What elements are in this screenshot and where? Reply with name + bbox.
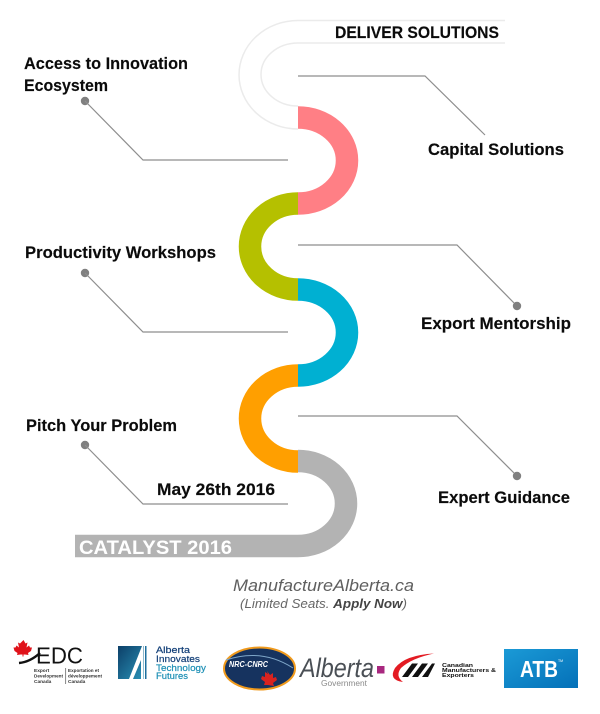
label: export mentorship: Export Mentorship <box>421 315 571 333</box>
label: pitch your problem: Pitch Your Problem <box>26 417 177 435</box>
winding road <box>75 20 505 546</box>
logo: Alberta Innovates Technology Futures <box>118 645 206 682</box>
logo: Alberta Government: Government <box>321 679 368 688</box>
road segment: pitch your problem (orange) <box>250 376 298 462</box>
callout line: export mentorship <box>298 245 521 310</box>
callout line: expert guidance <box>298 416 521 480</box>
label: access to innovation ecosystem: Access to Innovation <box>24 55 188 73</box>
road segment: deliver solutions (white) <box>239 20 505 129</box>
label: catalyst 2016: CATALYST 2016 <box>79 537 232 559</box>
logo: EDC: développement <box>68 674 102 680</box>
logo: EDC: Development <box>34 674 63 680</box>
road segment: export mentorship (blue) <box>298 290 347 376</box>
logo: EDC: Canada <box>68 679 86 685</box>
label: may 26th 2016: May 26th 2016 <box>157 481 275 499</box>
logo: ATB: ATB <box>520 656 558 682</box>
logo: Canadian Manufacturers & Exporters: Canadian <box>442 663 473 669</box>
logo: EDC <box>14 640 102 685</box>
road segment: productivity workshops (green) <box>250 204 298 290</box>
logo: Alberta Innovates Technology Futures: Alberta <box>156 645 191 656</box>
label: access to innovation ecosystem: Ecosystem <box>24 77 108 95</box>
callout line: pitch your problem <box>81 441 288 504</box>
logo: ATB: TM <box>558 659 563 663</box>
label: expert guidance: Expert Guidance <box>438 489 570 507</box>
limited seats note: (Limited Seats. Apply Now ) <box>240 597 407 611</box>
callout line: capital solutions <box>298 76 485 135</box>
logo: EDC: Exportation et <box>68 668 99 674</box>
logo: ATB <box>504 649 578 688</box>
logo: EDC: EDC <box>36 642 83 668</box>
logo: Canadian Manufacturers & Exporters: Exporters <box>442 673 474 679</box>
logo: NRC-CNRC: NRC-CNRC <box>229 660 268 669</box>
road segment: catalyst 2016 (grey) <box>75 461 346 546</box>
logo: Alberta Innovates Technology Futures: Technology <box>156 663 206 674</box>
label: capital solutions: Capital Solutions <box>428 141 564 159</box>
logo: Canadian Manufacturers & Exporters: Manufacturers & <box>442 668 496 674</box>
logo: Alberta Government: Alberta <box>298 653 374 683</box>
logo: EDC: Export <box>34 668 50 674</box>
callout line: productivity workshops <box>81 269 288 332</box>
logo: Canadian Manufacturers & Exporters <box>393 654 496 682</box>
logo: NRC-CNRC <box>224 648 295 690</box>
logo: EDC: Canada <box>34 679 52 685</box>
label: productivity workshops: Productivity Workshops <box>25 244 216 262</box>
label: access to innovation ecosystem <box>24 55 188 95</box>
callout line: access to innovation <box>81 97 288 160</box>
logo: Alberta Innovates Technology Futures: Futures <box>156 671 188 682</box>
website link: ManufactureAlberta.ca <box>233 576 414 595</box>
logo: Alberta Innovates Technology Futures: Innovates <box>156 654 200 665</box>
heading: deliver solutions: DELIVER SOLUTIONS <box>335 24 499 42</box>
road segment: capital solutions (pink) <box>298 118 347 204</box>
